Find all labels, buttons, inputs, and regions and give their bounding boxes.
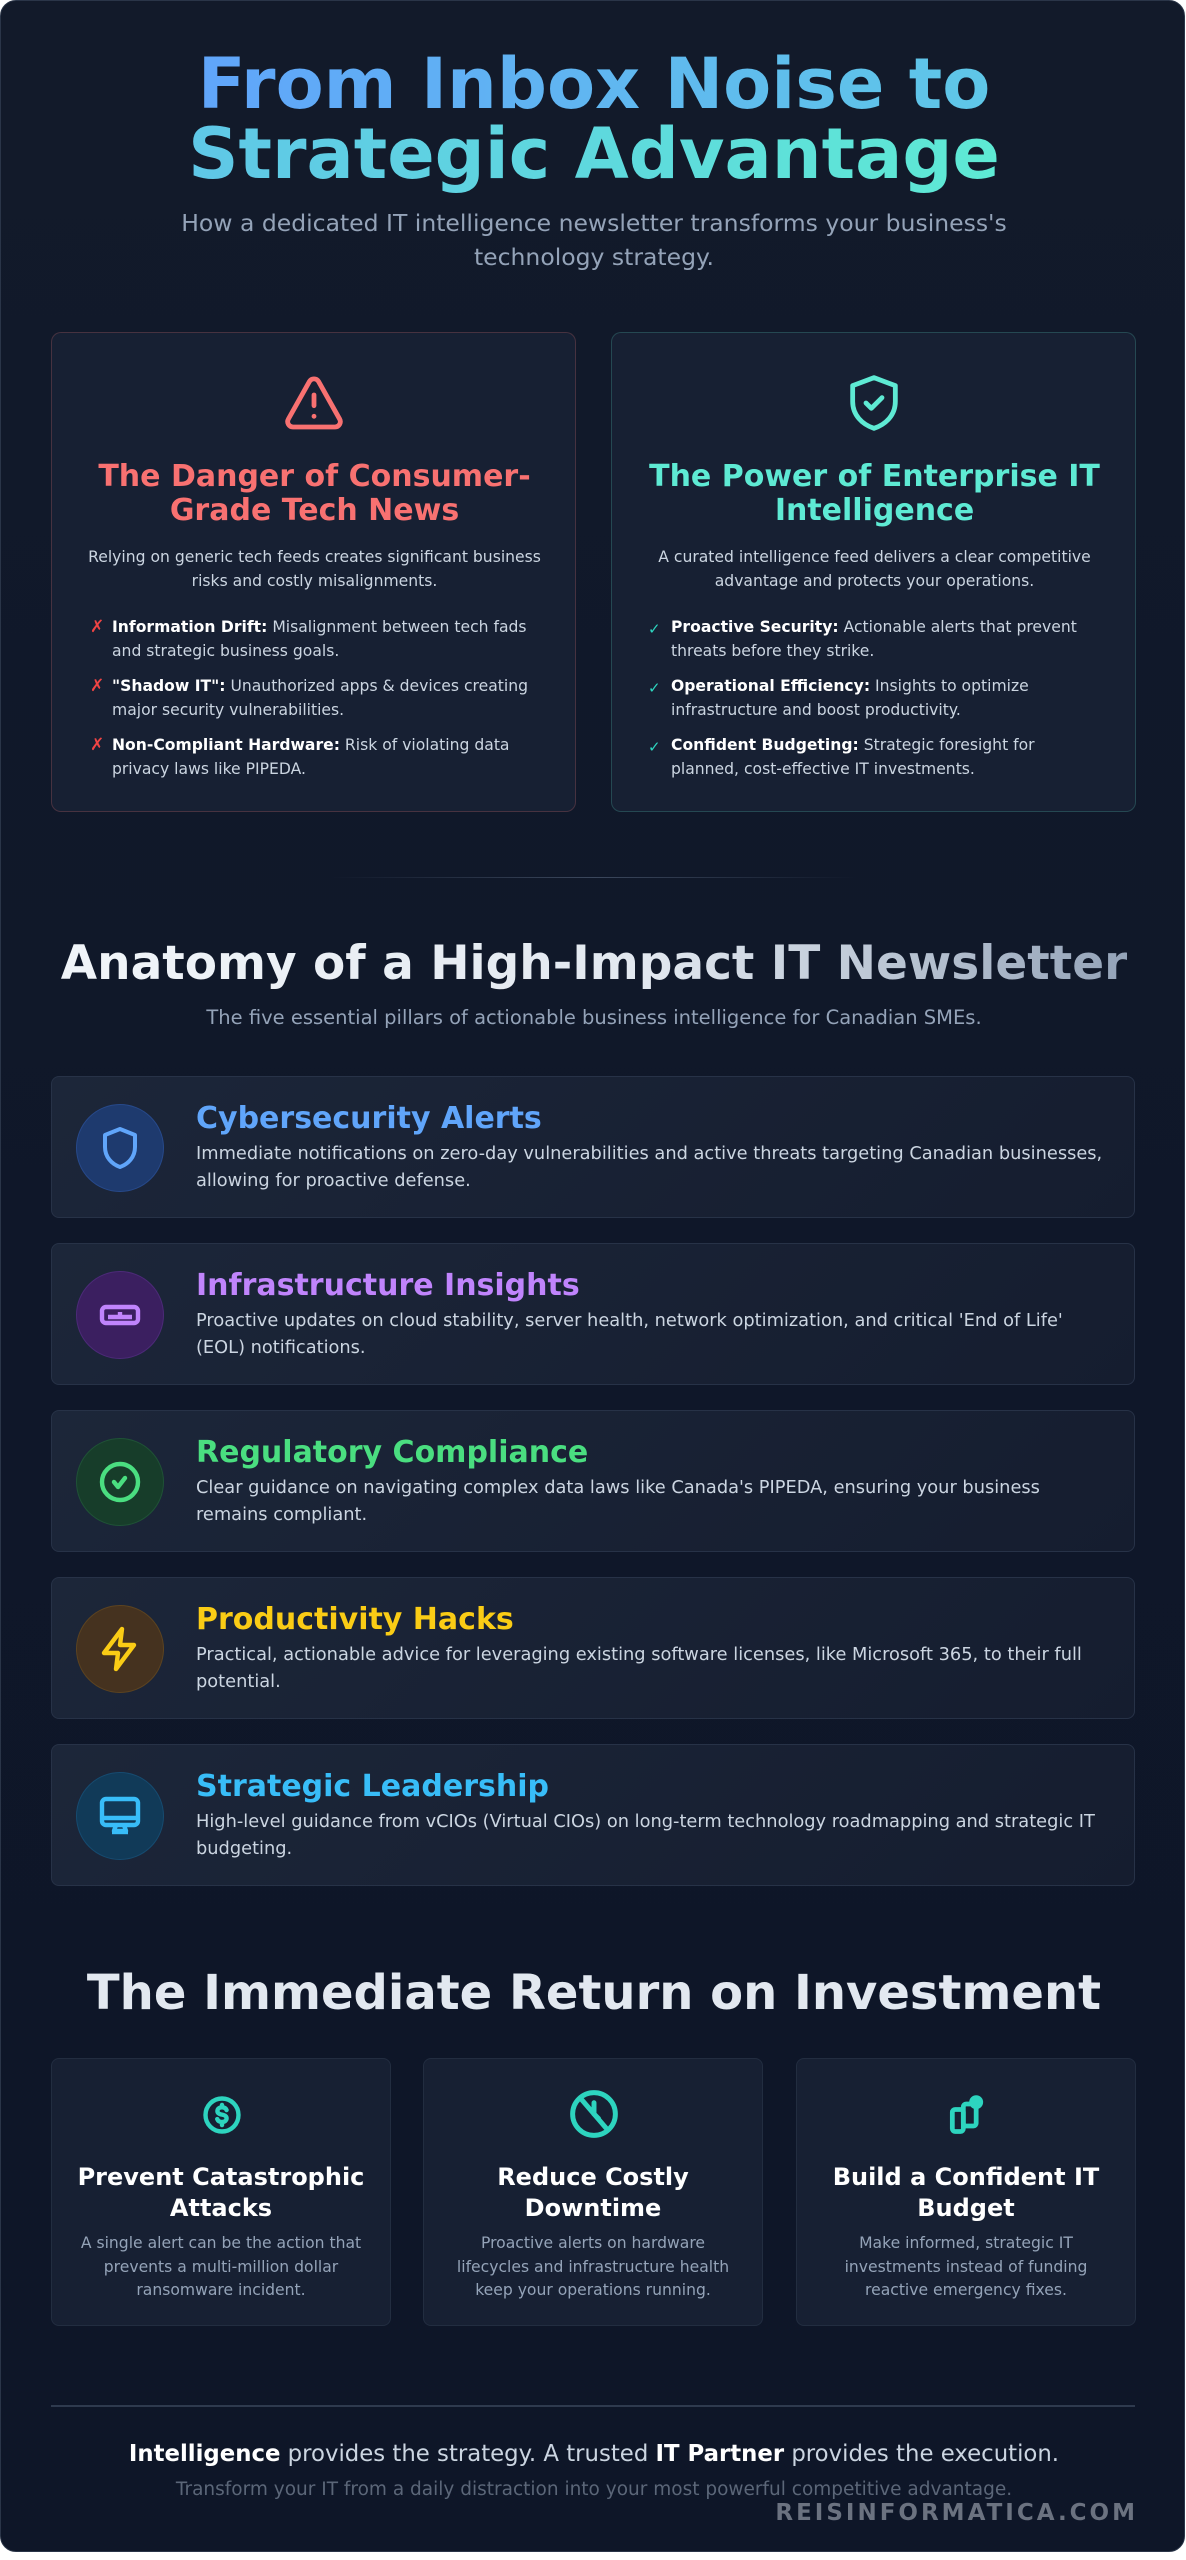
footer subline: Transform your IT from a daily distraction into your most powerful competitive advantage. <box>176 2479 1012 2500</box>
heading: power: Intelligence <box>775 493 974 528</box>
panel: reduce downtime <box>423 2058 763 2326</box>
text: prevent: ransomware incident. <box>136 2281 306 2299</box>
icon: monitor <box>76 1772 164 1860</box>
heading: prevent <box>78 2163 364 2222</box>
text: compliance <box>196 1477 1040 1525</box>
list: danger bullets: ✗ <box>90 676 104 696</box>
panel: productivity hacks <box>51 1577 1135 1719</box>
list: danger bullets: ✗ <box>90 735 104 755</box>
text: cybersecurity: allowing for proactive defense. <box>196 1170 471 1191</box>
heading: reduce: Reduce Costly <box>497 2163 689 2191</box>
heading: anatomy: Anatomy of a High-Impact IT Newsletter <box>61 936 1127 991</box>
list: danger bullets: and strategic business goals. <box>112 642 339 660</box>
text: budget: reactive emergency fixes. <box>865 2281 1067 2299</box>
subtitle: anatomy: The five essential pillars of actionable business intelligence for Canadian SMEs. <box>206 1006 982 1029</box>
list: power bullets: Confident Budgeting: Strategic foresight for <box>671 736 1035 754</box>
brand watermark: REISINFORMATICA.COM <box>775 2500 1138 2526</box>
text: leadership: High-level guidance from vCIOs (Virtual CIOs) on long-term technology roadmapping and strategic IT <box>196 1811 1095 1832</box>
title: From Inbox Noise to <box>198 43 990 125</box>
text: productivity: Practical, actionable advice for leveraging existing software licenses, like Microsoft 365, to their full <box>196 1644 1082 1665</box>
icon: check circle <box>76 1438 164 1526</box>
list: danger bullets: Information Drift: Misalignment between tech fads <box>112 618 527 636</box>
title: Strategic Advantage <box>188 113 1000 195</box>
text: productivity <box>196 1644 1082 1692</box>
text: leadership <box>196 1811 1095 1859</box>
heading: productivity: Productivity Hacks <box>196 1602 514 1637</box>
list: power bullets: planned, cost-effective IT investments. <box>671 760 975 778</box>
text: leadership: budgeting. <box>196 1838 292 1859</box>
text: infrastructure: Proactive updates on cloud stability, server health, network optimization, and critical 'End of Life' <box>196 1310 1063 1331</box>
heading: ROI: The Immediate Return on Investment <box>87 1965 1101 2021</box>
panel: infrastructure insights <box>51 1243 1135 1385</box>
text: compliance: Clear guidance on navigating complex data laws like Canada's PIPEDA, ensuring your business <box>196 1477 1040 1498</box>
list: danger bullets: Non-Compliant Hardware: Risk of violating data <box>112 736 510 754</box>
text: budget <box>845 2234 1087 2299</box>
icon: clock off <box>570 2090 618 2138</box>
heading: cybersecurity: Cybersecurity Alerts <box>196 1101 542 1136</box>
icon: warning triangle <box>285 376 343 430</box>
text: danger description <box>88 548 541 590</box>
text: prevent: prevents a multi-million dollar <box>104 2258 338 2276</box>
icon: server <box>76 1271 164 1359</box>
text: power description <box>658 548 1091 590</box>
list: power bullets: ✓ <box>648 679 661 697</box>
list: power bullets: infrastructure and boost productivity. <box>671 700 961 718</box>
text: danger description: risks and costly misalignments. <box>192 572 437 590</box>
subtitle: technology strategy. <box>474 243 714 271</box>
panel: confident budget <box>796 2058 1136 2326</box>
text: budget: investments instead of funding <box>845 2258 1087 2276</box>
list: power bullets: ✓ <box>648 620 661 638</box>
heading: danger: The Danger of Consumer- <box>98 459 531 494</box>
heading: budget: Build a Confident IT <box>833 2163 1099 2191</box>
text: prevent: A single alert can be the action that <box>81 2234 361 2252</box>
text: power description: A curated intelligence feed delivers a clear competitive <box>658 548 1091 566</box>
text: danger description: Relying on generic tech feeds creates significant business <box>88 548 541 566</box>
icon: shield <box>76 1104 164 1192</box>
icon: blocks <box>950 2095 984 2134</box>
heading: prevent: Attacks <box>170 2194 272 2222</box>
footer statement: Intelligence provides the strategy. A trusted IT Partner provides the execution. <box>129 2441 1059 2467</box>
panel: strategic leadership <box>51 1744 1135 1886</box>
text: reduce: Proactive alerts on hardware <box>481 2234 705 2252</box>
text: prevent <box>81 2234 361 2299</box>
heading: danger <box>98 459 531 528</box>
text: cybersecurity: Immediate notifications on zero-day vulnerabilities and active threats targeting Canadian businesses, <box>196 1143 1102 1164</box>
heading: leadership: Strategic Leadership <box>196 1769 549 1804</box>
icon: shield check <box>850 375 898 431</box>
heading: reduce: Downtime <box>525 2194 661 2222</box>
icon: lightning <box>76 1605 164 1693</box>
subtitle <box>181 209 1007 271</box>
list: danger bullets: ✗ <box>90 617 104 637</box>
list: power bullets: threats before they strike. <box>671 642 874 660</box>
list: power bullets: ✓ <box>648 738 661 756</box>
title <box>188 43 1000 195</box>
panel: danger of consumer-grade news <box>51 332 576 812</box>
heading: budget <box>833 2163 1100 2222</box>
heading: power: The Power of Enterprise IT <box>649 459 1100 494</box>
heading: reduce <box>497 2163 689 2222</box>
text: infrastructure: (EOL) notifications. <box>196 1337 366 1358</box>
panel: power of enterprise intelligence <box>611 332 1136 812</box>
text: productivity: potential. <box>196 1671 281 1692</box>
text: reduce: keep your operations running. <box>475 2281 711 2299</box>
heading: compliance: Regulatory Compliance <box>196 1435 588 1470</box>
text: cybersecurity <box>196 1143 1102 1191</box>
heading: budget: Budget <box>917 2194 1015 2222</box>
heading: prevent: Prevent Catastrophic <box>78 2163 364 2191</box>
text: reduce <box>457 2234 729 2299</box>
list: power bullets: Operational Efficiency: Insights to optimize <box>671 677 1029 695</box>
panel: regulatory compliance <box>51 1410 1135 1552</box>
panel: prevent attacks <box>51 2058 391 2326</box>
list: danger bullets: "Shadow IT": Unauthorized apps & devices creating <box>112 677 528 695</box>
text: reduce: lifecycles and infrastructure health <box>457 2258 729 2276</box>
heading: danger: Grade Tech News <box>170 493 459 528</box>
text: budget: Make informed, strategic IT <box>859 2234 1073 2252</box>
text: power description: advantage and protects your operations. <box>715 572 1034 590</box>
list: danger bullets <box>90 617 528 778</box>
heading: infrastructure: Infrastructure Insights <box>196 1268 580 1303</box>
panel: cybersecurity alerts <box>51 1076 1135 1218</box>
subtitle: How a dedicated IT intelligence newsletter transforms your business's <box>181 209 1007 237</box>
list: danger bullets: privacy laws like PIPEDA. <box>112 760 306 778</box>
text: compliance: remains compliant. <box>196 1504 367 1525</box>
list: power bullets <box>648 618 1077 778</box>
list: power bullets: Proactive Security: Actionable alerts that prevent <box>671 618 1077 636</box>
icon: dollar <box>203 2096 241 2134</box>
list: danger bullets: major security vulnerabilities. <box>112 700 344 718</box>
text: infrastructure <box>196 1310 1063 1358</box>
heading: power <box>649 459 1100 528</box>
